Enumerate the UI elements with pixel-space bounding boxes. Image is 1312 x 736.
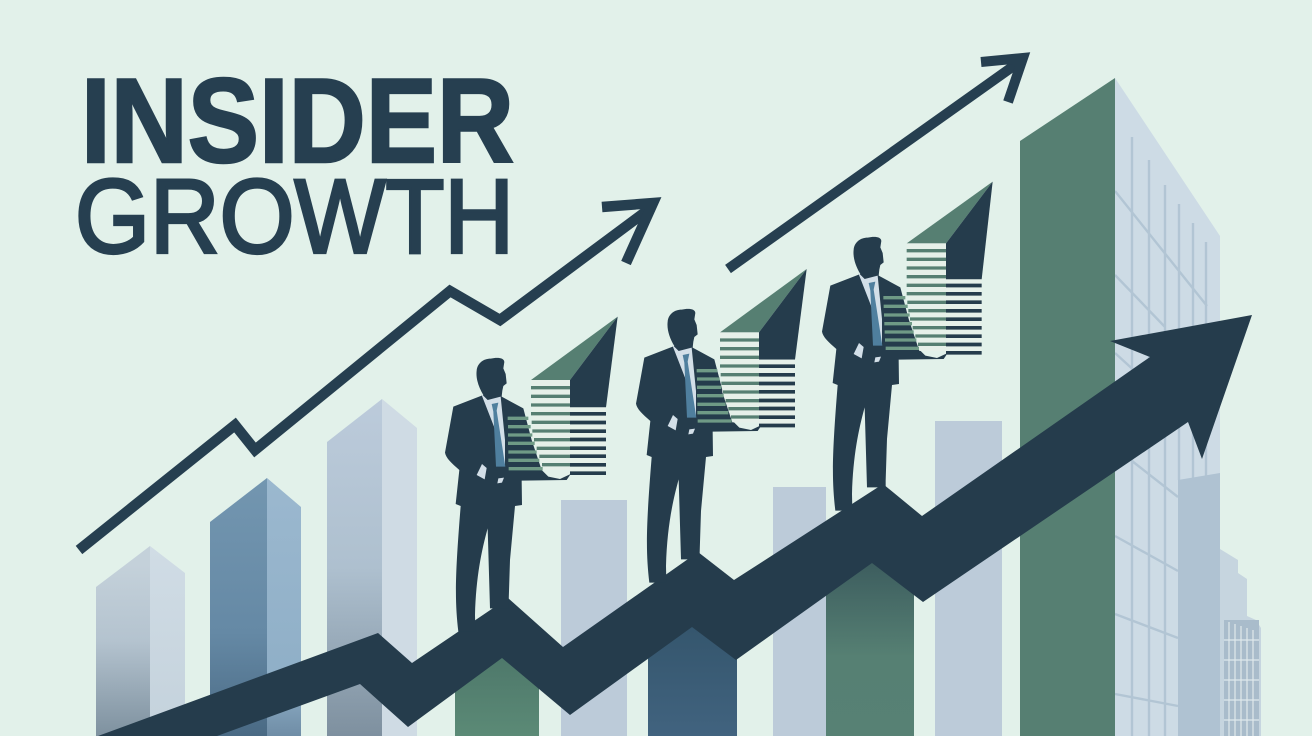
cuffs: [854, 343, 881, 362]
striped stack: [697, 269, 807, 427]
businessman silhouette: [822, 237, 948, 511]
necktie: [683, 354, 696, 418]
shirt: [672, 344, 696, 418]
businessman silhouette: [445, 358, 571, 632]
column 1: [96, 546, 185, 736]
figure 1 with stack: [445, 317, 618, 632]
column 5: [561, 500, 627, 736]
big zigzag arrow: [98, 315, 1252, 736]
figure 3 with stack: [822, 182, 993, 511]
striped stack: [883, 182, 993, 355]
title: [75, 54, 514, 276]
background building: far stepped tower: [1220, 549, 1261, 736]
shirt: [858, 272, 882, 346]
title: INSIDER: [81, 54, 514, 188]
necktie: [869, 282, 882, 346]
column 2: [210, 478, 301, 736]
bar chart columns: [96, 399, 1002, 736]
column 6: [648, 620, 737, 736]
column 9: [935, 421, 1002, 736]
cuffs: [477, 464, 504, 483]
column 4: [455, 640, 539, 736]
column 3: [327, 399, 417, 736]
tall tower with glass side and green face: [1020, 78, 1220, 736]
column 8: [826, 560, 914, 736]
striped stack: [508, 317, 618, 475]
necktie: [492, 403, 505, 467]
businessman silhouette: [636, 309, 762, 583]
title: GROWTH: [75, 158, 514, 276]
shirt: [481, 393, 505, 467]
column 7: [773, 487, 826, 736]
figure 2 with stack: [636, 269, 807, 583]
thin straight trend arrow: [728, 58, 1023, 269]
thin zigzag trend arrow: [79, 203, 653, 550]
cuffs: [668, 415, 695, 434]
